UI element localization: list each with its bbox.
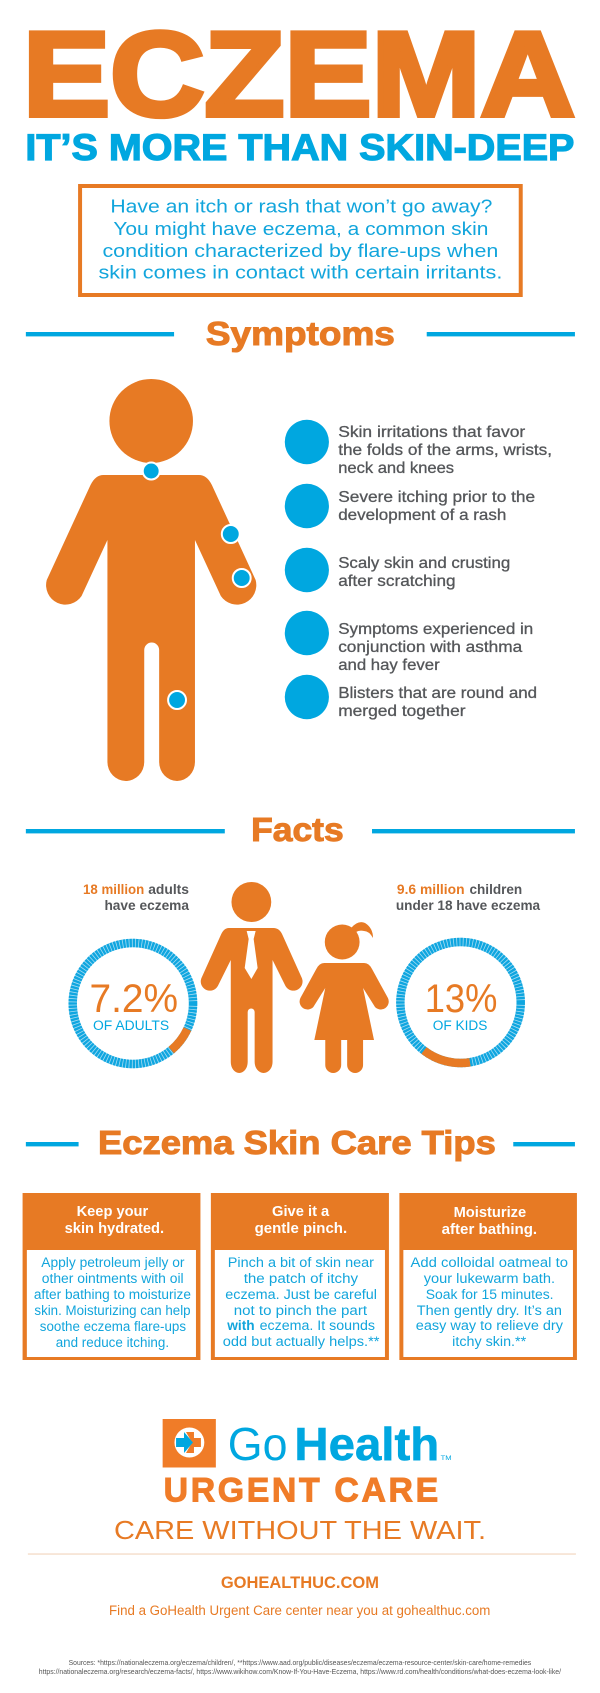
children statistic text: 9.6 million	[397, 881, 465, 897]
ring chart: kids 13%: 13%	[425, 977, 497, 1021]
sources	[39, 1660, 561, 1676]
tip card: pinch: not to pinch the part	[234, 1302, 367, 1318]
children statistic text	[396, 881, 540, 913]
symptom list: conjunction with asthma	[338, 639, 523, 656]
heading: symptoms: Symptoms	[206, 315, 395, 352]
tagline: CARE WITHOUT THE WAIT.	[114, 1517, 486, 1545]
symptom list: the folds of the arms, wrists,	[338, 442, 552, 459]
intro callout box: You might have eczema, a common skin	[113, 218, 488, 239]
tip card: pinch	[211, 1193, 389, 1360]
symptom list	[285, 420, 552, 720]
logo subtitle: urgent care: URGENT CARE	[164, 1471, 438, 1510]
tip card: hydrated: after bathing to moisturize	[34, 1286, 191, 1302]
ring chart: kids 13%: OF KIDS	[433, 1017, 487, 1033]
ring chart: adults 7.2%	[73, 943, 193, 1064]
icon: man with tie	[201, 882, 303, 1073]
adult statistic text: adults	[148, 881, 189, 897]
tip card: hydrated	[23, 1193, 200, 1360]
tip card: hydrated: other ointments with oil	[42, 1270, 184, 1286]
tip card: moisturize: Add colloidal oatmeal to	[411, 1254, 568, 1270]
tip card: pinch: the patch of itchy	[244, 1270, 358, 1286]
children statistic text: under 18 have eczema	[396, 897, 540, 913]
tip card: pinch: Give it a	[272, 1203, 330, 1220]
tip card: moisturize: your lukewarm bath.	[424, 1270, 555, 1286]
body figure with rash spots	[46, 379, 256, 781]
tip card: pinch: Pinch a bit of skin near	[228, 1254, 374, 1270]
tip card: moisturize: easy way to relieve dry	[416, 1317, 563, 1333]
intro callout box: Have an itch or rash that won’t go away?	[110, 196, 492, 217]
tip card: hydrated: and reduce itching.	[56, 1334, 169, 1350]
website link: GOHEALTHUC.COM	[221, 1574, 379, 1592]
tip card: hydrated: skin. Moisturizing can help	[34, 1302, 191, 1318]
logo: GoHealth: Health	[294, 1418, 439, 1470]
tip card: moisturize: Moisturize	[454, 1204, 526, 1221]
heading: skin care tips: Eczema Skin Care Tips	[98, 1124, 496, 1161]
tip card: pinch: eczema. It sounds	[260, 1317, 375, 1333]
sources: Sources: *https://nationaleczema.org/eczema/children/, **https://www.aad.org/public/diseases/eczema/eczema-resource-center/skin-care/home-remedies	[69, 1660, 532, 1667]
symptom list: Skin irritations that favor	[338, 424, 525, 441]
icon: girl with ponytail	[300, 922, 389, 1073]
symptom list: Blisters that are round and	[338, 685, 537, 702]
subtitle: IT’S MORE THAN SKIN-DEEP	[25, 126, 574, 168]
symptom list: merged together	[338, 703, 466, 720]
intro callout box: condition characterized by flare-ups when	[102, 240, 498, 261]
ring chart: adults 7.2%: 7.2%	[90, 977, 178, 1021]
tip card: moisturize: itchy skin.**	[452, 1333, 527, 1349]
tip card: moisturize: Soak for 15 minutes.	[426, 1286, 554, 1302]
tip card: hydrated: Apply petroleum jelly or	[41, 1254, 185, 1270]
tip card: moisturize: Then gently dry. It’s an	[417, 1302, 562, 1318]
adult statistic text: 18 million	[83, 881, 144, 897]
symptom list: Scaly skin and crusting	[338, 555, 510, 572]
tip card: hydrated: soothe eczema flare-ups	[40, 1318, 186, 1334]
adult statistic text	[83, 881, 189, 913]
sources: https://nationaleczema.org/research/eczema-facts/, https://www.wikihow.com/Know-If-You-Have-Eczema, https://www.rd.com/health/conditions/what-does-eczema-look-like/	[39, 1669, 561, 1676]
heading: symptoms	[26, 315, 575, 352]
intro callout box: skin comes in contact with certain irritants.	[98, 262, 502, 283]
symptom list: after scratching	[338, 573, 456, 590]
intro callout box	[80, 186, 521, 295]
heading: facts	[26, 811, 575, 848]
call to action: Find a GoHealth Urgent Care center near you at gohealthuc.com	[109, 1602, 490, 1618]
tip card: moisturize: after bathing.	[442, 1221, 537, 1238]
symptom list: and hay fever	[338, 657, 440, 674]
symptom list: Symptoms experienced in	[338, 621, 533, 638]
children statistic text: children	[469, 881, 522, 897]
logo: GoHealth: TM	[441, 1456, 452, 1462]
heading: facts: Facts	[251, 811, 344, 848]
ring chart: adults 7.2%: OF ADULTS	[93, 1017, 169, 1033]
title: ECZEMA	[23, 8, 575, 142]
heading: skin care tips	[26, 1124, 575, 1161]
tip card: pinch: eczema. Just be careful	[225, 1286, 377, 1302]
logo: GoHealth: Go	[228, 1418, 287, 1470]
tip card: hydrated: skin hydrated.	[65, 1220, 164, 1237]
symptom list: development of a rash	[338, 507, 506, 524]
tip card: pinch: gentle pinch.	[255, 1220, 347, 1237]
ring chart: kids 13%	[400, 942, 521, 1063]
tip card: hydrated: Keep your	[77, 1203, 148, 1220]
adult statistic text: have eczema	[104, 897, 189, 913]
tip card: pinch: odd but actually helps.**	[223, 1333, 380, 1349]
symptom list: neck and knees	[338, 460, 454, 477]
tip card: moisturize	[399, 1193, 577, 1360]
symptom list: Severe itching prior to the	[338, 489, 535, 506]
tip card: pinch: with	[226, 1317, 255, 1333]
logo: GoHealth	[163, 1418, 452, 1470]
